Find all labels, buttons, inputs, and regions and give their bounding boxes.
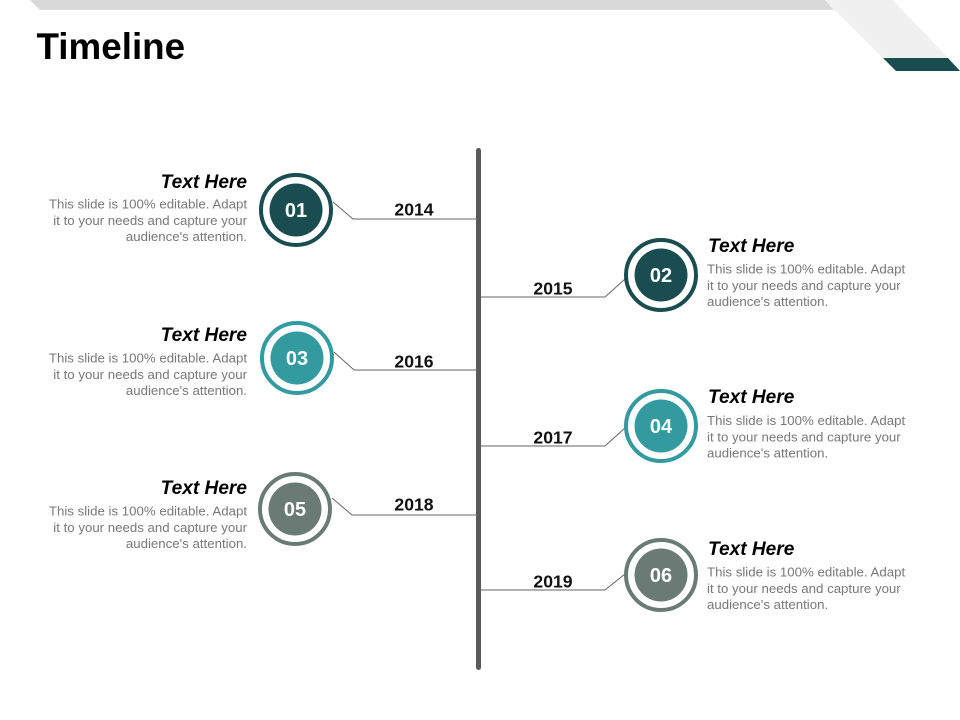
year 2019: 2019 [533, 572, 573, 592]
text block 06: audience's attention. [707, 597, 828, 612]
year 2017: 2017 [533, 428, 573, 448]
title: Timeline [36, 26, 185, 67]
text block 02 [707, 236, 905, 309]
connector 01 [333, 202, 478, 219]
connector 05 [332, 498, 478, 515]
badge 06: 06 [650, 565, 672, 587]
text block 01: Text Here [161, 172, 247, 193]
milestone 02 [481, 236, 905, 310]
text block 05: Text Here [161, 478, 247, 499]
text block 05: audience's attention. [126, 536, 247, 551]
connector 03 [334, 352, 478, 370]
badge 04 [626, 391, 696, 461]
text block 03: This slide is 100% editable. Adapt [49, 350, 247, 366]
year 2015: 2015 [533, 278, 573, 298]
text block 03: Text Here [161, 325, 247, 346]
connector 04 [481, 428, 625, 446]
text block 06 [707, 539, 905, 612]
text block 05: it to your needs and capture your [53, 520, 248, 535]
text block 03: it to your needs and capture your [53, 367, 248, 382]
badge 04: 04 [650, 416, 673, 438]
text block 06: This slide is 100% editable. Adapt [707, 564, 905, 580]
year 2016: 2016 [394, 352, 434, 372]
badge 05 [260, 474, 330, 544]
text block 04: it to your needs and capture your [707, 430, 901, 444]
badge 01: 01 [285, 200, 307, 222]
text block 01: audience's attention. [126, 229, 247, 244]
connector 06 [481, 574, 625, 590]
text block 04: This slide is 100% editable. Adapt [707, 413, 905, 428]
badge 02 [626, 240, 696, 310]
text block 04: audience's attention. [707, 446, 828, 460]
milestone 06 [481, 539, 905, 612]
text block 06: it to your needs and capture your [707, 581, 901, 596]
badge 02: 02 [650, 265, 672, 287]
text block 02: This slide is 100% editable. Adapt [707, 262, 905, 276]
milestone 01 [49, 172, 478, 245]
text block 01: it to your needs and capture your [53, 213, 248, 228]
text block 03 [49, 325, 248, 398]
text block 01 [49, 172, 248, 244]
text block 01: This slide is 100% editable. Adapt [49, 196, 247, 212]
header decoration [30, 0, 960, 71]
year 2018: 2018 [394, 494, 434, 514]
text block 04 [707, 387, 905, 460]
text block 06: Text Here [708, 539, 795, 560]
badge 06 [626, 540, 696, 610]
badge 03: 03 [286, 348, 308, 370]
timeline axis [476, 148, 481, 670]
year 2014: 2014 [394, 200, 434, 220]
text block 05 [49, 478, 248, 551]
badge 03 [262, 323, 332, 393]
text block 04: Text Here [708, 387, 795, 408]
badge 01 [261, 175, 331, 245]
text block 02: audience's attention. [707, 294, 828, 309]
connector 02 [481, 279, 625, 297]
milestone 05 [49, 474, 478, 551]
milestone 03 [49, 323, 478, 398]
text block 03: audience's attention. [126, 383, 247, 398]
text block 02: it to your needs and capture your [707, 278, 901, 293]
badge 05: 05 [284, 499, 306, 521]
text block 02: Text Here [708, 236, 795, 257]
text block 05: This slide is 100% editable. Adapt [49, 504, 247, 518]
milestone 04 [481, 387, 905, 461]
